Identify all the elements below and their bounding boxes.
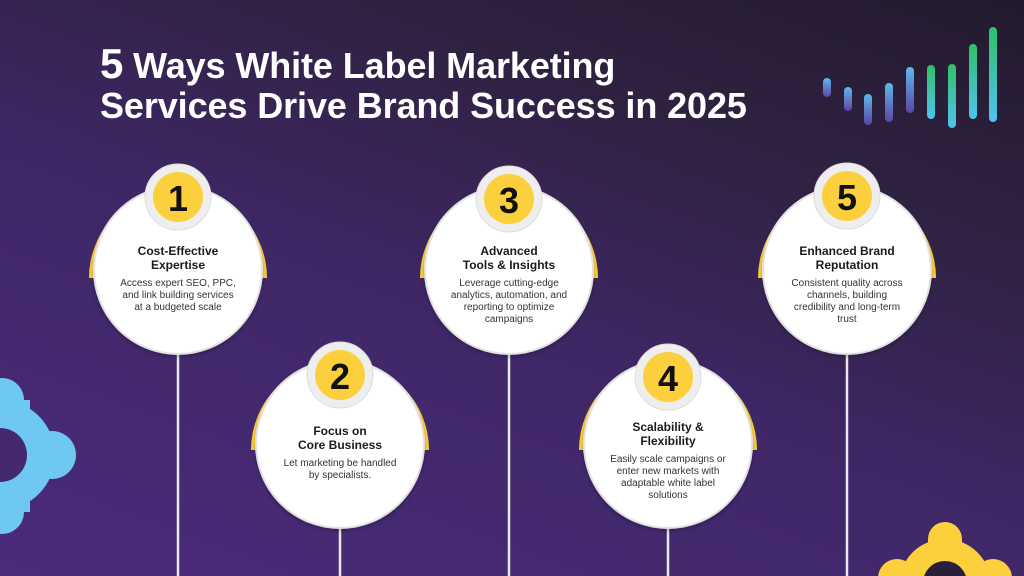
text: card 5: Enhanced Brand [799, 244, 895, 258]
text: card 3 [451, 244, 567, 325]
text: card 2: by specialists. [309, 470, 371, 481]
circle 3: 3 [499, 180, 519, 221]
text: card 4: Scalability & [632, 420, 704, 434]
circle 2: 2 [330, 356, 350, 397]
text: card 3: Advanced [480, 244, 538, 258]
text: card 5: trust [837, 314, 857, 325]
text: card 1 [120, 244, 236, 313]
text: card 3: campaigns [485, 314, 533, 325]
circle 4 [579, 344, 757, 528]
title: Services Drive Brand Success in 2025 [100, 85, 747, 126]
text: card 5 [791, 244, 903, 325]
text: card 5: channels, building [807, 290, 887, 301]
title: 5 Ways White Label Marketing [100, 40, 615, 87]
decoration: yellow shape [878, 522, 1012, 576]
circle 1 [89, 164, 267, 354]
decoration: blue shape [0, 378, 76, 534]
text: card 4: Easily scale campaigns or [610, 454, 726, 465]
text: card 2: Let marketing be handled [284, 458, 396, 469]
text: card 4 [610, 420, 726, 501]
text: card 4: adaptable white label [621, 478, 715, 489]
text: card 4: solutions [648, 490, 688, 501]
text: card 1: Cost-Effective [138, 244, 218, 258]
text: card 3: Leverage cutting-edge [459, 278, 559, 289]
text: card 2 [284, 424, 396, 481]
text: card 4: Flexibility [640, 434, 696, 448]
text: card 4: enter new markets with [617, 466, 719, 477]
circle 5 [758, 163, 936, 354]
circle 2 [251, 342, 429, 528]
text: card 1: at a budgeted scale [134, 302, 222, 313]
circle 5: 5 [837, 177, 857, 218]
icon: bar chart [823, 27, 997, 128]
stems [178, 340, 847, 576]
text: card 3: analytics, automation, and [451, 290, 567, 301]
text: card 1: Expertise [151, 258, 205, 272]
text: card 5: Consistent quality across [791, 278, 903, 289]
circle 1: 1 [168, 178, 188, 219]
text: card 5: credibility and long-term [794, 302, 900, 313]
title [100, 40, 747, 126]
circle 3 [420, 166, 598, 354]
text: card 1: and link building services [122, 290, 234, 301]
text: card 3: reporting to optimize [464, 302, 554, 313]
text: card 5: Reputation [816, 258, 878, 272]
circle 4: 4 [658, 358, 678, 399]
text: card 3: Tools & Insights [463, 258, 555, 272]
text: card 2: Focus on [313, 424, 367, 438]
text: card 2: Core Business [298, 438, 382, 452]
text: card 1: Access expert SEO, PPC, [120, 278, 236, 289]
